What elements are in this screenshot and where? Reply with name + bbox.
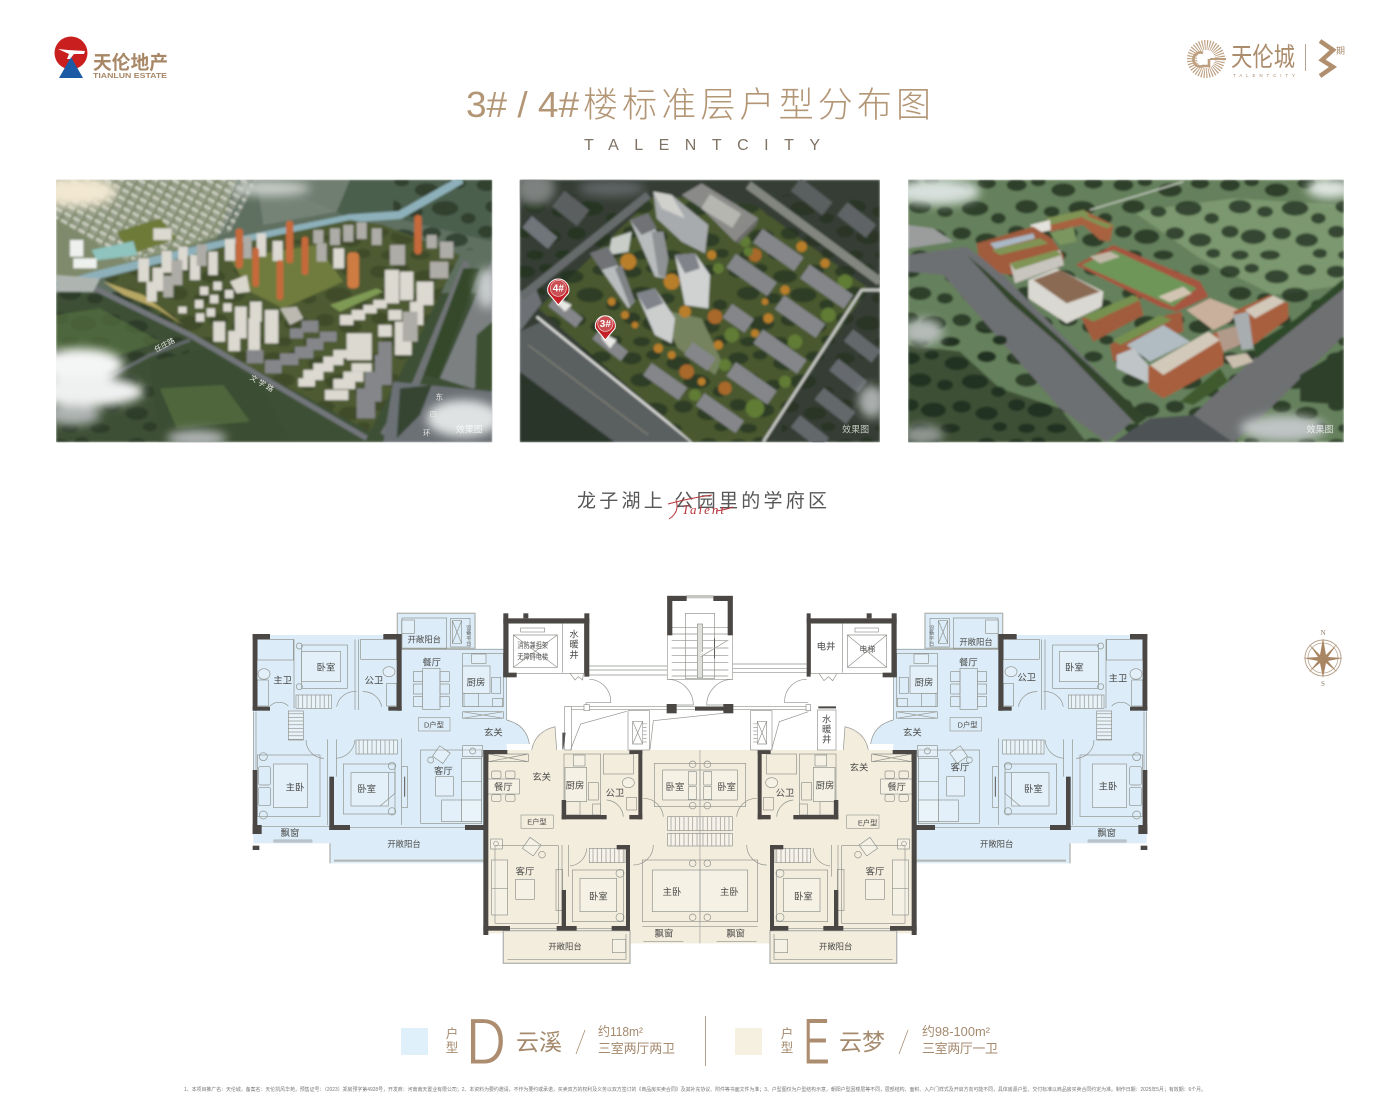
legend divider: [705, 1016, 706, 1066]
legend: D type: 云溪: [516, 1029, 562, 1055]
unit E fill: [485, 727, 700, 963]
room labels: left D unit: D户型: [424, 720, 444, 729]
legend: D type: 三室两厅两卫: [598, 1041, 675, 1056]
room labels: right D unit: D户型: [958, 720, 978, 729]
legend: E type: 型: [781, 1041, 793, 1055]
room labels: right E unit: 厨房: [816, 779, 834, 790]
room labels: left D unit: 设: [466, 623, 472, 631]
legend: E type: 三室两厅一卫: [922, 1041, 998, 1056]
room labels: right D unit: 开敞阳台: [959, 637, 993, 647]
script overlay: Talent: [668, 495, 733, 519]
room labels: right E unit: 公卫: [776, 788, 794, 798]
walls: [253, 634, 642, 935]
room labels: left E unit: 厨房: [566, 779, 584, 790]
photo: overall district aerial: 效果图: [456, 423, 483, 434]
room labels: left E unit: 开敞阳台: [548, 942, 582, 952]
script overlay: Talent: Talent: [682, 502, 724, 517]
legend: E type: 户: [781, 1026, 793, 1041]
room labels: left E unit: [494, 771, 684, 952]
floor plan: right lift core: 电井: [817, 640, 835, 651]
unit E furnishings: [488, 727, 700, 963]
room labels: left E unit: 玄关: [532, 771, 551, 782]
room labels: right D unit: 卧室: [1024, 783, 1043, 794]
photo: overall district aerial: 环: [423, 429, 430, 438]
room labels: right E unit: 开敞阳台: [819, 942, 852, 952]
legend: D type: 型: [446, 1041, 458, 1055]
floor plan: left lift core: 暖: [569, 639, 579, 650]
floor plan: right lift core: 电梯: [859, 644, 875, 654]
floor plan: left lift core: 井: [569, 649, 579, 660]
photo: overall district aerial: 任庄路: [153, 336, 177, 354]
unit D fill: [253, 613, 529, 863]
room labels: right E unit: 卧室: [794, 890, 813, 901]
room labels: left E unit: 主卧: [663, 886, 681, 897]
unit D furnishings: [253, 613, 529, 863]
room labels: right E unit: 客厅: [866, 865, 884, 876]
room labels: left D unit: 平: [466, 635, 472, 642]
room labels: left D unit: 客厅: [434, 765, 453, 776]
floor plan: left half with D and E units: [253, 613, 700, 963]
floor plan: left lift core: 消防兼担架: [517, 640, 548, 650]
photo: overall district aerial: 四: [430, 409, 437, 418]
compass: [1303, 629, 1343, 688]
marker: building 4#: [548, 279, 569, 305]
room labels: left D unit: 卧室: [317, 662, 335, 673]
legend: E type: 云梦: [839, 1029, 885, 1055]
swatch E: [735, 1028, 762, 1055]
marker: building 3#: [595, 316, 615, 340]
room labels: right D unit: 台: [929, 639, 934, 647]
room labels: right D unit: 飘窗: [1097, 827, 1116, 838]
room labels: right D unit: 玄关: [903, 726, 922, 737]
marker: building 3#: 3#: [600, 319, 611, 330]
corridor walls: [562, 664, 811, 750]
title: 3# / 4#: [466, 84, 579, 125]
room labels: left D unit: 餐厅: [422, 657, 441, 668]
subtitle: TALENT CITY: TALENTCITY: [584, 137, 820, 154]
legend: E type: 约98-100m²: [922, 1024, 991, 1039]
photo: overall district aerial: 东: [436, 392, 443, 401]
floor plan: right lift core: 水: [822, 714, 832, 725]
photo: overall district aerial: [30, 177, 500, 447]
legend: D type: 约118m²: [598, 1024, 644, 1039]
floor plan: right lift core: 井: [822, 734, 831, 745]
swatch D: [401, 1028, 428, 1055]
room labels: left D unit: 开敞阳台: [408, 634, 441, 644]
room labels: right E unit: 主卧: [720, 886, 739, 897]
room labels: right E unit: [717, 762, 906, 952]
legend: D type: D: [466, 1004, 506, 1078]
room labels: right D unit: 公卫: [1017, 673, 1036, 683]
room labels: left D unit: 公卫: [365, 676, 383, 686]
compass: N: [1320, 629, 1326, 637]
logo: Tianlun Estate: TIANLUN ESTATE: [93, 71, 167, 80]
floor plan: right lift core: 暖: [822, 724, 832, 735]
floor plan: right half mirrored: [700, 613, 1147, 963]
room labels: left D unit: 备: [466, 629, 472, 637]
room labels: right E unit: E户型: [858, 818, 877, 827]
photo: site aerial with building markers: 效果图: [842, 423, 869, 434]
room labels: left D unit: 飘窗: [281, 827, 299, 838]
marker: building 4#: 4#: [553, 284, 564, 295]
room labels: right E unit: 餐厅: [887, 781, 906, 792]
legend: E type: E: [803, 1004, 830, 1078]
photo: school aerial: [893, 178, 1353, 445]
floor plan: core with stairs, lifts and shafts: [562, 596, 811, 750]
room labels: left E unit: E户型: [527, 818, 547, 827]
room labels: left E unit: 飘窗: [655, 928, 673, 939]
room labels: right D unit: 主卫: [1109, 672, 1127, 683]
room labels: left D unit: [273, 623, 503, 849]
footnote: 1、本项目推广名：天伦城，备案名：天伦凯风华苑，预售证号：（2023）郑房预字第4928号，开发商：河南南天置业有限公司；2、本资料为要约邀请，不作为要约或承诺，买卖双方的权利及义务以双方签订的《商品房买卖合同》及其补充协议、附件等书面文件为准；3、户型图仅为户型结构示意，朝阳户型因楼层等不同，层部结构、面积、入户门样式及开启方向可能不同，具体房源户型、交付标准以商品房买卖合同约定为准。制作日期：2025年5月；有效期：6个月。: [184, 1085, 1206, 1093]
room labels: left E unit: 餐厅: [494, 781, 513, 792]
slogan: 龙子湖上 公园里的学府区: 龙子湖上 公园里的学府区: [577, 490, 827, 512]
legend: E type: [735, 1004, 998, 1078]
logo: Talent City phase 3: 天伦城: [1231, 42, 1295, 72]
photo: site aerial with building markers: [515, 172, 885, 450]
room labels: left D unit: 卧室: [357, 783, 376, 794]
room labels: left E unit: 公卫: [606, 788, 624, 798]
title: 楼标准层户型分布图: [583, 86, 931, 125]
room labels: right D unit: 卧室: [1065, 662, 1084, 673]
room labels: left E unit: 客厅: [516, 865, 534, 876]
legend: D type: 户: [446, 1026, 458, 1041]
photo: overall district aerial: 文 学 路: [248, 373, 276, 394]
floor plan: right lift core: [807, 613, 897, 750]
logo: Talent City phase 3: TALENTCITY: [1233, 73, 1295, 78]
room labels: left E unit: 卧室: [589, 890, 608, 901]
room labels: right D unit: 备: [929, 629, 935, 637]
logo: Talent City phase 3: [1192, 41, 1345, 78]
room labels: right D unit: 餐厅: [959, 657, 978, 668]
room labels: right D unit: 客厅: [951, 762, 969, 773]
logo: Talent City phase 3: 期: [1336, 46, 1345, 56]
room labels: left D unit: 主卫: [273, 675, 292, 686]
stairwell: [667, 596, 733, 679]
logo: Tianlun Estate: [54, 36, 168, 80]
room labels: right D unit: 设: [929, 623, 935, 631]
room labels: right D unit: 开敞阳台: [980, 839, 1013, 849]
photo: school aerial: 效果图: [1307, 423, 1333, 434]
room labels: left D unit: 主卧: [286, 782, 304, 793]
compass: S: [1321, 680, 1325, 688]
room labels: right D unit: [903, 623, 1127, 849]
room labels: right E unit: 卧室: [717, 781, 736, 792]
room labels: left D unit: 台: [466, 639, 471, 647]
floor plan: left lift core: 无障碍电梯: [517, 651, 548, 661]
room labels: left D unit: 玄关: [484, 726, 503, 737]
room labels: right D unit: 厨房: [915, 676, 933, 687]
legend: D type: [401, 1004, 675, 1078]
floor plan: left lift core: 水: [569, 628, 579, 639]
floor plan: left lift core: [503, 613, 589, 680]
room labels: right E unit: 玄关: [850, 762, 868, 773]
room labels: right E unit: 飘窗: [726, 928, 745, 939]
logo: Tianlun Estate: 天伦地产: [93, 51, 168, 74]
room labels: left D unit: 厨房: [467, 676, 485, 687]
room labels: left E unit: 卧室: [666, 781, 684, 792]
room labels: right D unit: 主卧: [1099, 780, 1117, 791]
room labels: left D unit: 开敞阳台: [387, 839, 421, 849]
room labels: right D unit: 平: [929, 635, 935, 642]
